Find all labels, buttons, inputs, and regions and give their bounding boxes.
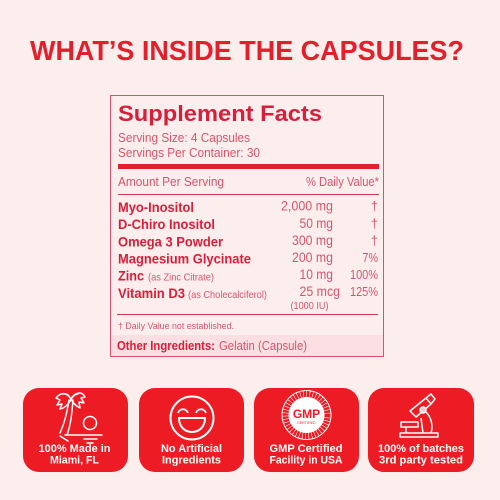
label: 3rd party tested <box>379 454 463 466</box>
ingredient names: Zinc <box>118 268 144 284</box>
serving information: Serving Size: 4 Capsules <box>118 131 250 145</box>
badge: made in Miami <box>23 388 128 472</box>
amounts: (1000 IU) <box>290 301 328 312</box>
title: WHAT’S INSIDE THE CAPSULES? <box>30 35 464 66</box>
label: Ingredients <box>162 454 221 466</box>
ingredient notes: (as Zinc Citrate) <box>148 272 214 284</box>
ingredient notes <box>148 272 267 301</box>
label: 100% of batches <box>378 443 464 455</box>
badge: GMP certified <box>254 388 359 472</box>
serving information <box>118 131 260 160</box>
icon: GMP seal: CERTIFIED <box>297 421 316 425</box>
amounts: 25 mcg <box>300 283 340 299</box>
label <box>161 443 222 466</box>
label: 100% Made in <box>38 443 111 455</box>
daily values: 7% <box>362 250 378 265</box>
ingredient names: Magnesium Glycinate <box>118 252 251 266</box>
other ingredients: Gelatin (Capsule) <box>219 339 307 353</box>
label: GMP Certified <box>270 443 342 455</box>
daily values: 125% <box>350 284 378 299</box>
daily values: † <box>371 216 378 231</box>
daily values <box>350 198 378 299</box>
footnote: † Daily Value not established. <box>118 321 234 332</box>
ingredient names: Vitamin D3 <box>118 286 185 301</box>
icon: laughing face <box>170 396 214 440</box>
panel heading: Supplement Facts <box>118 101 322 126</box>
daily values: 100% <box>350 267 378 282</box>
label <box>378 443 464 466</box>
ingredient names: Omega 3 Powder <box>118 234 224 250</box>
other ingredients band <box>111 335 383 356</box>
serving information: Servings Per Container: 30 <box>118 146 260 160</box>
column headers: Amount Per Serving <box>118 175 224 189</box>
amounts: 10 mg <box>300 266 333 282</box>
amounts <box>281 198 340 312</box>
column headers <box>118 175 379 189</box>
label: Facility in USA <box>270 454 343 466</box>
thick rule <box>118 164 379 169</box>
ingredient names: D-Chiro Inositol <box>118 217 215 232</box>
label: No Artificial <box>161 443 222 455</box>
other ingredients <box>117 339 307 353</box>
icon: GMP seal <box>282 390 332 440</box>
amounts: 300 mg <box>292 232 333 248</box>
daily values: † <box>371 198 378 214</box>
label <box>270 443 343 466</box>
icon: microscope <box>400 394 438 437</box>
ingredient names: Myo-Inositol <box>118 200 194 215</box>
icon: GMP seal: GMP <box>293 407 320 421</box>
ingredient names <box>118 200 251 301</box>
amounts: 2,000 mg <box>281 198 333 214</box>
label: Miami, FL <box>50 454 99 466</box>
other ingredients: Other Ingredients: <box>117 339 215 353</box>
ingredient notes: (as Cholecalciferol) <box>188 289 267 301</box>
column headers: % Daily Value* <box>306 175 379 189</box>
amounts: 200 mg <box>292 249 333 265</box>
icon: palm tree and sun <box>56 393 102 443</box>
amounts: 50 mg <box>300 215 333 231</box>
label <box>38 443 111 466</box>
daily values: † <box>371 233 378 248</box>
badge: no artificial ingredients <box>139 388 244 472</box>
panel: supplement facts <box>110 96 384 356</box>
badge: third party tested <box>368 388 474 472</box>
